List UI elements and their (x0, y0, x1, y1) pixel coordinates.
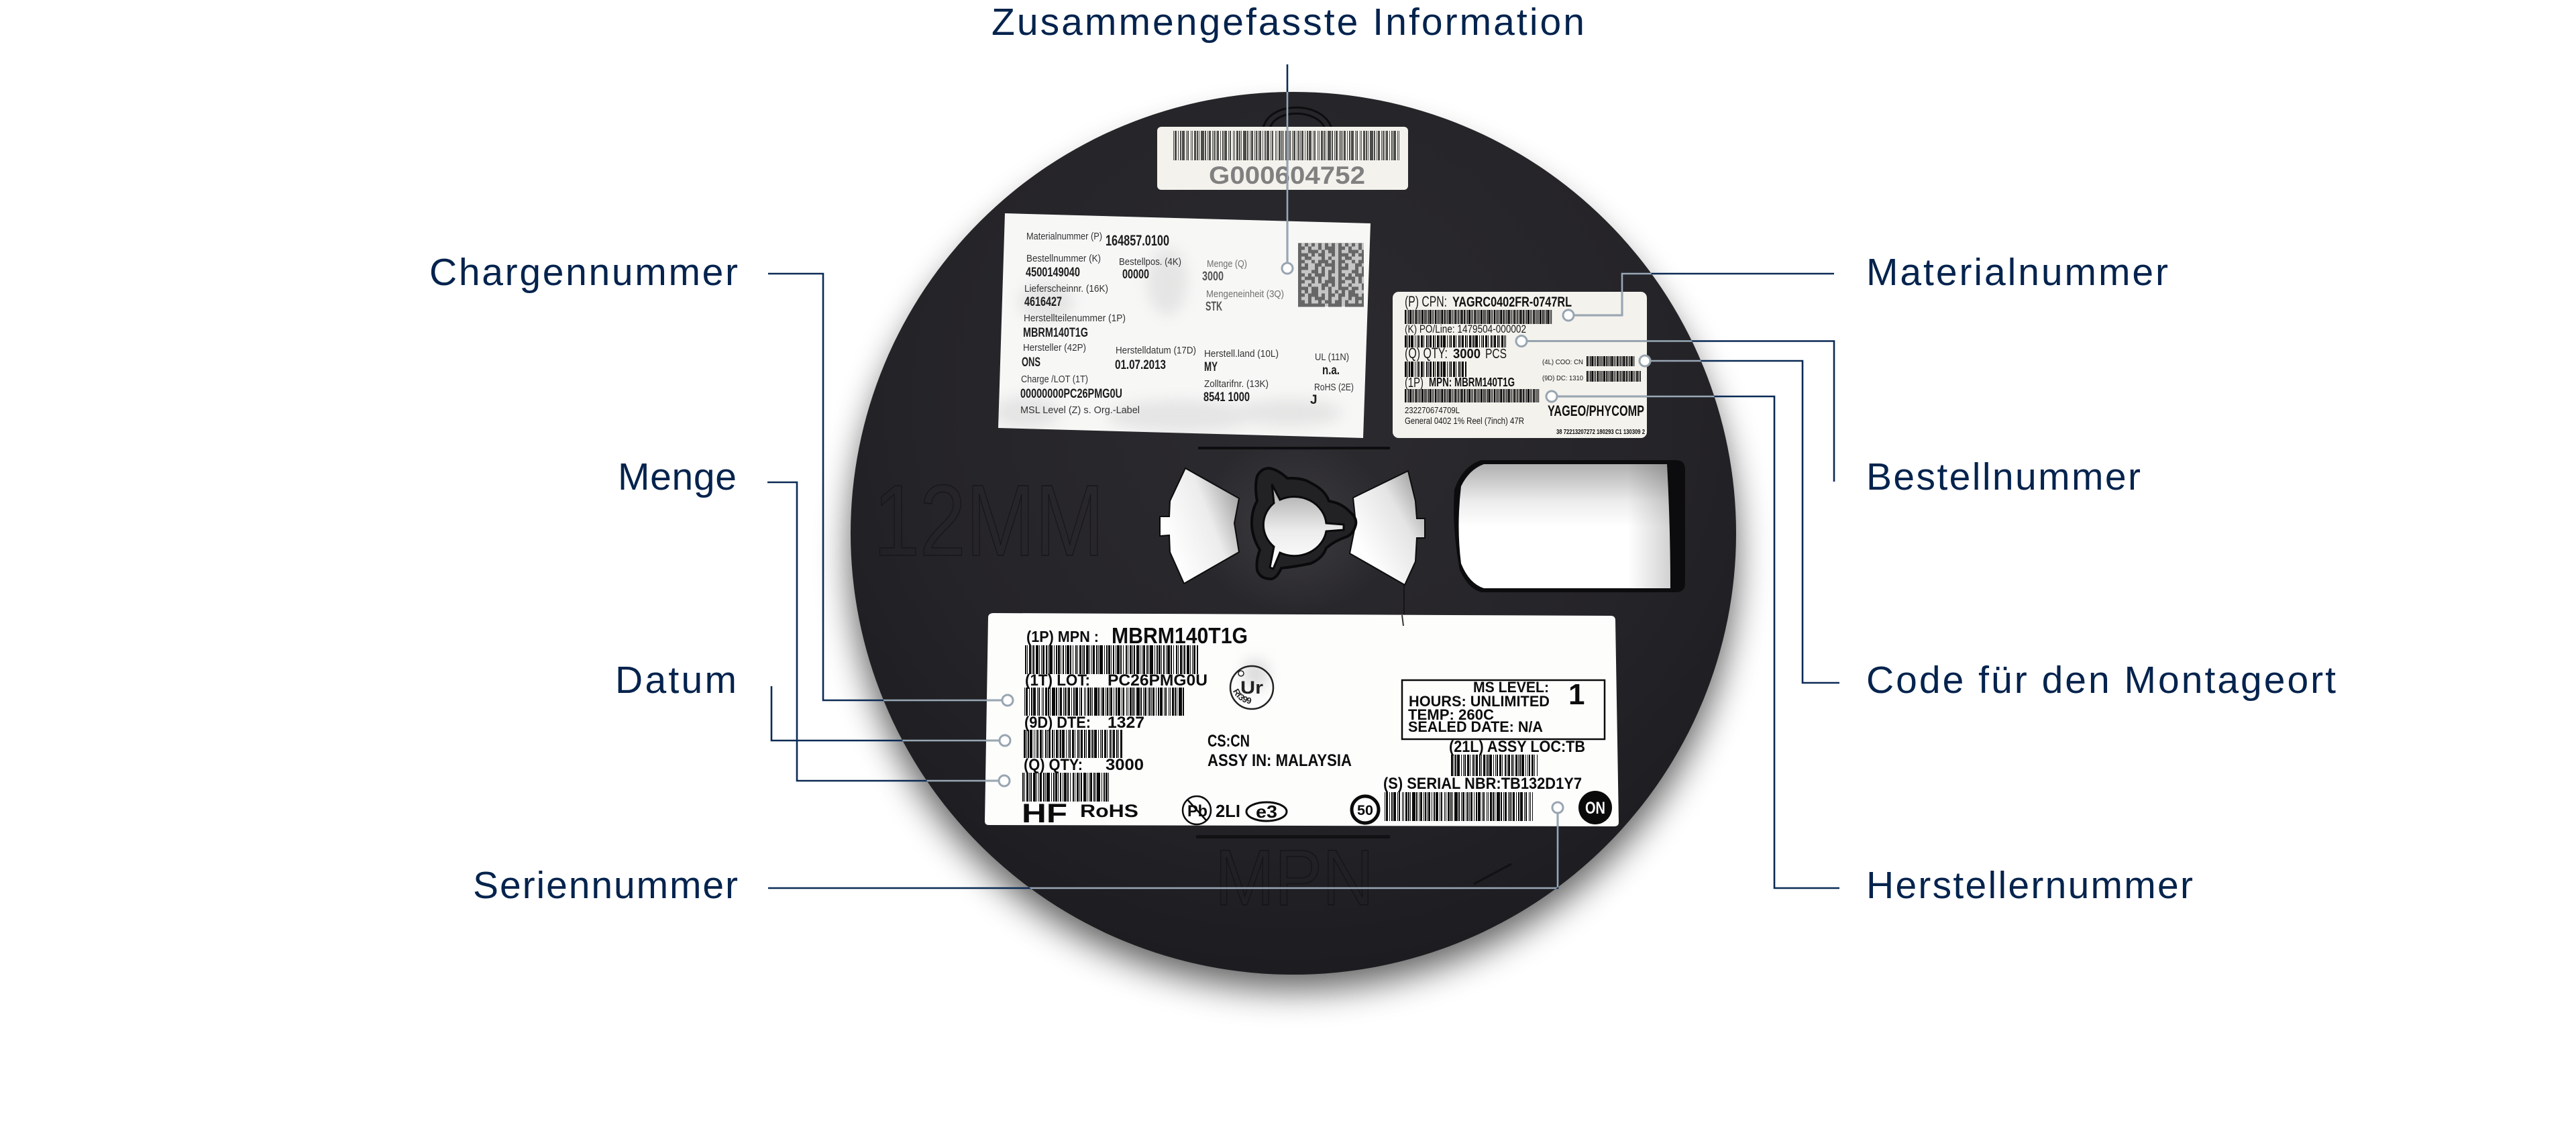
component supplier label: YAGRC0402FR-0747RL (1452, 294, 1572, 310)
leader: Herstellernummer (1546, 391, 1839, 888)
manufacturer label: MBRM140T1G (1112, 623, 1248, 648)
right window (1350, 471, 1425, 585)
MS level box: 1 (1568, 678, 1585, 711)
engraved 12MM: 12MM (873, 463, 1104, 577)
manufacturer label: CS:CN (1208, 732, 1250, 751)
barcode COO (1587, 356, 1635, 366)
icon: e3: e3 (1256, 802, 1277, 822)
left window (1160, 468, 1239, 584)
barcode sticker: top (1157, 127, 1408, 190)
leader: Bestellnummer (1516, 335, 1834, 482)
label: Seriennummer: Seriennummer (473, 864, 738, 907)
manufacturer label (985, 613, 1619, 828)
distributor label text: Herstell.land (10L) (1204, 348, 1279, 360)
barcode CPN (1405, 310, 1552, 324)
barcode QTY (1022, 773, 1110, 802)
component supplier label: PCS (1485, 347, 1507, 362)
distributor label text: ONS (1022, 356, 1040, 370)
distributor label text: MSL Level (Z) s. Org.-Label (1020, 404, 1140, 416)
component supplier label: (Q) QTY: (1405, 345, 1448, 362)
distributor label text (1020, 231, 1354, 416)
component supplier label (1393, 292, 1647, 438)
manufacturer label: 3000 (1106, 756, 1144, 774)
MS level box: TEMP: 260C (1408, 706, 1494, 723)
distributor label text: 4616427 (1024, 295, 1062, 309)
icon: ON logo (1578, 791, 1612, 824)
component supplier label: (K) PO/Line: 1479504-000002 (1405, 323, 1526, 335)
distributor label text: 01.07.2013 (1115, 358, 1166, 372)
component supplier label: 3000 (1453, 347, 1481, 362)
icon: UL mark with stain: Ur (1240, 677, 1264, 698)
engraved MPN: MPN (1215, 834, 1374, 922)
manufacturer label: 1327 (1108, 714, 1144, 732)
MS level box: HOURS: UNLIMITED (1409, 693, 1550, 710)
top sticker number: G000604752 (1209, 162, 1365, 189)
large rectangular window (1454, 460, 1685, 592)
manufacturer label: 2LI (1216, 801, 1240, 821)
component supplier label: 38 72213207272 180293 C1 130309 2 (1556, 429, 1645, 436)
distributor label text: J (1310, 393, 1318, 407)
distributor label text: 164857.0100 (1106, 232, 1169, 249)
MS level box (1402, 678, 1605, 739)
top notch arcs (1263, 107, 1332, 128)
component supplier label: YAGEO/PHYCOMP (1548, 402, 1644, 419)
distributor label text: Bestellnummer (K) (1026, 253, 1101, 264)
scratch mark (1474, 864, 1511, 884)
moulded bar above hub (1198, 447, 1390, 449)
label: Code fuer den Montageort: Code für den Montageort (1866, 659, 2336, 702)
barcode LOT (1024, 688, 1185, 716)
barcode PO (1405, 335, 1506, 347)
manufacturer label: PC26PMG0U (1108, 671, 1208, 690)
component supplier label: General 0402 1% Reel (7inch) 47R (1405, 415, 1524, 426)
distributor label text: 4500149040 (1026, 266, 1080, 280)
icon: e3 (1246, 802, 1287, 822)
distributor label text: Herstelldatum (17D) (1116, 345, 1196, 356)
distributor label text: Charge /LOT (1T) (1021, 374, 1088, 385)
reel disc (851, 92, 1736, 975)
label: Materialnummer: Materialnummer (1866, 251, 2168, 294)
moulded bar above MPN (1196, 835, 1390, 838)
manufacturer label: (9D) DTE: (1024, 714, 1091, 732)
hub opening (1263, 484, 1344, 569)
distributor label text: Mengeneinheit (3Q) (1206, 288, 1284, 300)
manufacturer label: (S) SERIAL NBR:TB132D1Y7 (1383, 775, 1582, 793)
heading: Zusammengefasste Information: Zusammengefasste Information (991, 1, 1585, 44)
barcode DC (1587, 371, 1641, 382)
hub (1252, 468, 1356, 579)
icon: UL mark with stain (1229, 656, 1275, 710)
reel drop shadow (851, 117, 1736, 989)
leader: Datum (771, 686, 1010, 746)
barcode serial (1385, 792, 1533, 821)
component supplier label: 232270674709L (1405, 405, 1460, 415)
leader: Materialnummer (1563, 274, 1834, 321)
manufacturer label: (21L) ASSY LOC:TB (1449, 738, 1585, 756)
component supplier label: (9D) DC: 1310 (1542, 375, 1583, 382)
label: Menge: Menge (618, 455, 737, 498)
distributor label text: Hersteller (42P) (1023, 342, 1086, 353)
barcode DTE (1024, 730, 1122, 758)
distributor label text: Herstellteilenummer (1P) (1024, 313, 1126, 324)
distributor label text: 00000000PC26PMG0U (1020, 387, 1122, 401)
distributor label text: MY (1204, 360, 1218, 374)
barcode QTY (1405, 362, 1466, 377)
icon: ON logo: ON (1585, 799, 1605, 818)
distributor label (993, 213, 1371, 438)
distributor label text: 8541 1000 (1203, 390, 1250, 404)
distributor label text: Bestellpos. (4K) (1119, 256, 1181, 268)
infographic: reel label diagram (431, 7, 2336, 1016)
manufacturer label: ASSY IN: MALAYSIA (1208, 751, 1352, 770)
distributor label text: 3000 (1202, 270, 1224, 284)
icon: lead free: Pb (1187, 802, 1208, 820)
distributor label text: MBRM140T1G (1023, 326, 1088, 340)
hub halo (1194, 439, 1395, 614)
MS level box: MS LEVEL: (1473, 679, 1549, 696)
distributor label text: RoHS (2E) (1314, 382, 1354, 393)
label staining (993, 248, 1342, 432)
seam (1403, 584, 1405, 615)
label: Herstellernummer: Herstellernummer (1866, 864, 2193, 907)
icon: 50 recycling (1352, 796, 1379, 823)
distributor label text: Menge (Q) (1207, 258, 1247, 270)
MS level box: SEALED DATE: N/A (1408, 718, 1543, 735)
top barcode (1173, 131, 1399, 160)
icon: 50 recycling: 50 (1357, 803, 1373, 818)
component supplier label: MPN: MBRM140T1G (1429, 376, 1515, 389)
manufacturer label: RoHS (1080, 801, 1138, 821)
distributor label text: UL (11N) (1315, 351, 1349, 363)
manufacturer label: (1T) LOT: (1025, 671, 1090, 690)
leader: Seriennummer (768, 802, 1563, 888)
icon: lead free (1183, 796, 1211, 824)
barcode assembly location (1451, 755, 1538, 776)
label: Bestellnummer: Bestellnummer (1866, 455, 2141, 498)
leader: Zusammengefasste Information (1282, 64, 1293, 274)
data matrix code (1298, 243, 1364, 307)
distributor label text: 00000 (1122, 268, 1149, 282)
component supplier label: (4L) COO: CN (1542, 359, 1583, 366)
component supplier label: (1P) (1405, 376, 1424, 390)
distributor label text: STK (1205, 300, 1222, 314)
leader: Menge (767, 482, 1010, 786)
leader: Chargennummer (768, 274, 1013, 706)
component supplier label: (P) CPN: (1405, 293, 1447, 310)
leader: Code fuer den Montageort (1640, 356, 1839, 683)
manufacturer label: (Q) QTY: (1024, 756, 1083, 774)
distributor label text: n.a. (1322, 364, 1340, 378)
manufacturer label: HF (1022, 799, 1067, 828)
distributor label text: Materialnummer (P) (1026, 231, 1102, 242)
label: Datum: Datum (615, 659, 737, 702)
barcode MPN (1405, 389, 1540, 402)
barcode MPN (1025, 645, 1199, 674)
icon: UL mark with stain: RI399 (1233, 688, 1252, 704)
manufacturer label: (1P) MPN : (1026, 628, 1099, 645)
distributor label text: Zolltarifnr. (13K) (1204, 378, 1269, 390)
label: Chargennummer: Chargennummer (429, 251, 738, 294)
distributor label text: Lieferscheinnr. (16K) (1024, 283, 1108, 294)
